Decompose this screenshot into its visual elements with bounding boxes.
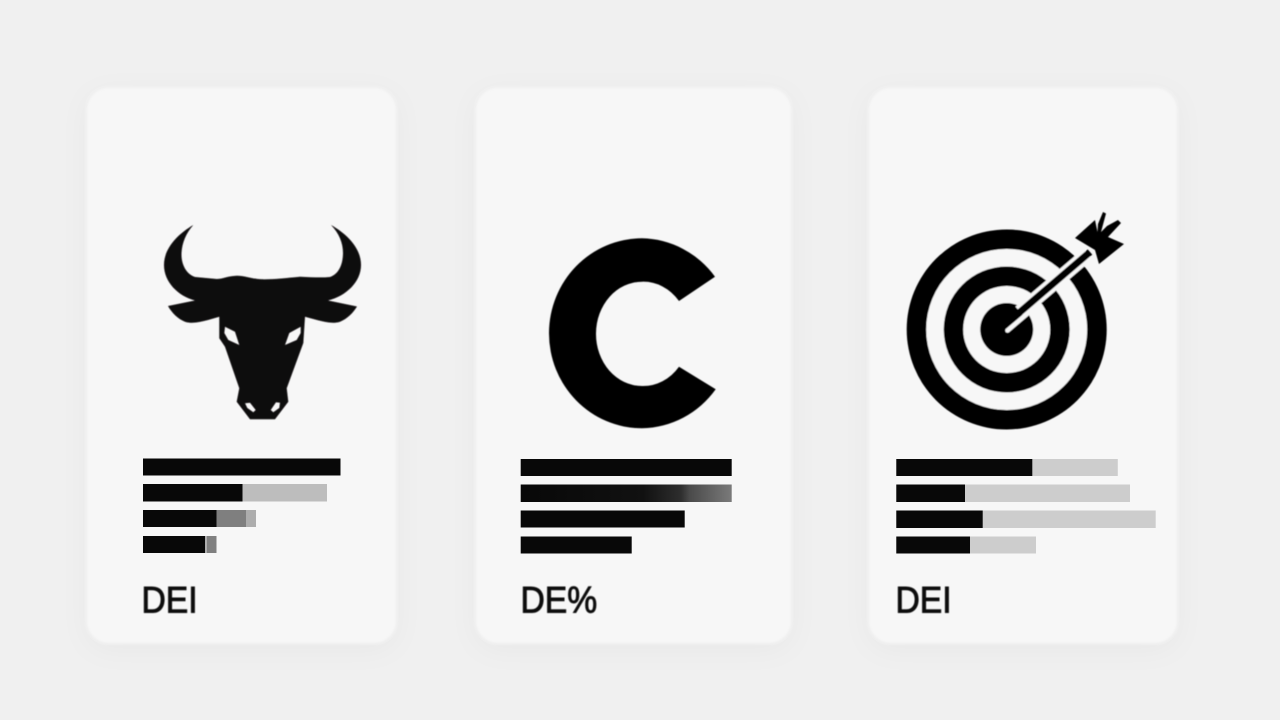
- panel: bull card: [87, 88, 396, 643]
- icon: letter C: [549, 238, 716, 428]
- bar chart: C: [521, 459, 732, 554]
- label: DEI: DEI: [896, 580, 952, 621]
- panel: target card: [869, 88, 1177, 643]
- bar chart: bull: [143, 458, 340, 553]
- bar chart: target: [896, 459, 1156, 554]
- label: DEI: DEI: [142, 580, 198, 621]
- panel: letter C card: [476, 88, 791, 643]
- label: DE%: DE%: [520, 580, 597, 621]
- icon: bull head: [164, 225, 361, 419]
- icon: target with arrow: [907, 212, 1124, 430]
